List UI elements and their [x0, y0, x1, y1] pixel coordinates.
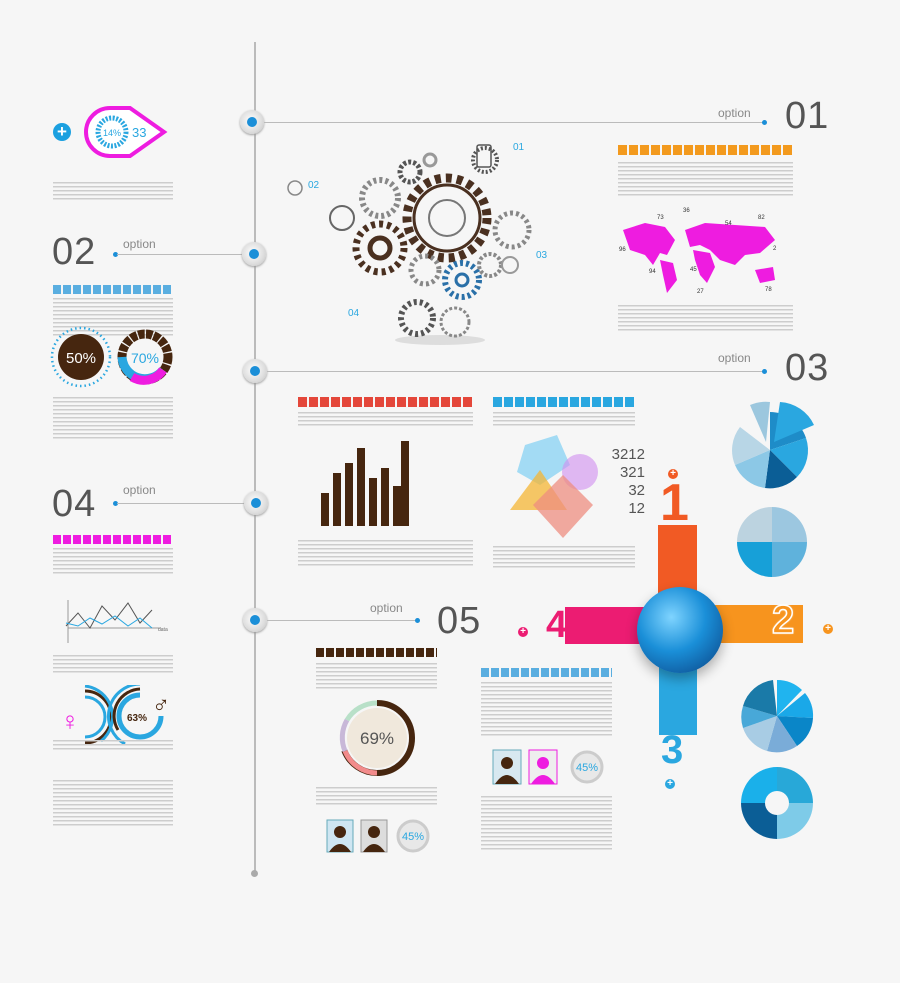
text block: [618, 162, 793, 196]
text block: [53, 298, 173, 338]
arm 2 orange: [705, 605, 803, 643]
text block: [53, 548, 173, 576]
bar chart: [321, 441, 409, 526]
node 5 connector: [242, 608, 420, 634]
gears cluster: 02: [308, 180, 320, 191]
option 04 label: option: [123, 483, 156, 497]
cross infographic with globe: 2: [772, 598, 794, 642]
node 3 connector: [242, 358, 767, 386]
text block: [618, 305, 793, 333]
world map: 27: [697, 289, 704, 295]
pattern bar light blue: [481, 668, 612, 677]
icon: plus: [53, 123, 71, 141]
text block: [316, 787, 437, 807]
chart: 50% and 70%: 70%: [131, 350, 159, 366]
world map: 82: [758, 215, 765, 221]
pattern bar magenta: [53, 535, 173, 544]
pin badge 14% 33: [84, 106, 168, 158]
avatars row 1: 45%: [402, 831, 424, 843]
world map: 2: [773, 246, 777, 252]
text block: [53, 182, 173, 202]
text block: [316, 663, 437, 691]
shapes chart: [510, 435, 598, 538]
numbers list: 32: [628, 482, 645, 499]
pattern bar blue 2: [493, 397, 635, 407]
chart: gender arcs 63%: 63%: [127, 713, 147, 724]
numbers list: 3212: [612, 446, 645, 463]
cross infographic with globe: +: [825, 623, 831, 634]
gears cluster: 04: [348, 308, 360, 319]
world map: 78: [765, 287, 772, 293]
text block: [481, 682, 612, 736]
numbers list: [612, 446, 645, 517]
avatars row 2: [492, 750, 604, 784]
world map: 36: [683, 208, 690, 214]
option 02 label: option: [123, 237, 156, 251]
world map: 73: [657, 215, 664, 221]
gears cluster: 01: [513, 142, 525, 153]
pie charts right: [732, 402, 814, 839]
number 04: 04: [52, 483, 96, 525]
cross infographic with globe: 1: [660, 474, 689, 532]
world map: 96: [619, 247, 626, 253]
text block: [493, 412, 635, 426]
node 1 connector: [238, 110, 767, 136]
option 01 label: option: [718, 106, 751, 120]
world map: 94: [649, 269, 656, 275]
avatars row 1: [326, 820, 430, 852]
text blocks: [53, 740, 173, 752]
line chart: data: [158, 627, 168, 633]
pattern bar red: [298, 397, 473, 407]
chart: 50% and 70%: 50%: [66, 350, 96, 367]
world map: 54: [725, 221, 732, 227]
cross infographic with globe: +: [520, 626, 526, 637]
cross infographic with globe: 3: [661, 728, 683, 772]
arm 4 pink: [565, 607, 675, 644]
chart: gender arcs 63%: ♂: [152, 692, 170, 719]
node 4 connector: [113, 490, 270, 518]
world map: [619, 208, 777, 295]
cross infographic with globe: [518, 468, 833, 789]
text block: [53, 397, 173, 441]
gears cluster: 03: [536, 250, 548, 261]
text block: [53, 780, 173, 826]
pattern bar brown: [316, 648, 437, 657]
chart: gender arcs 63%: ♀: [60, 706, 80, 736]
text block: [298, 412, 473, 428]
option 03 label: option: [718, 351, 751, 365]
text block: [481, 796, 612, 850]
numbers list: 321: [620, 464, 645, 481]
arm 3 blue: [659, 665, 697, 735]
pin badge 14% 33: 14%: [103, 128, 121, 138]
option 05 label: option: [370, 601, 403, 615]
chart: gender arcs 63%: [60, 685, 170, 744]
cross infographic with globe: +: [667, 778, 673, 789]
69% ring: 69%: [360, 729, 394, 748]
chart: 50% and 70%: [50, 326, 172, 388]
plus markers: [668, 469, 678, 479]
number 01: 01: [785, 95, 829, 137]
pattern bar orange: [618, 145, 793, 155]
gears cluster: [287, 142, 548, 345]
line chart: [66, 600, 168, 643]
timeline axis: [254, 42, 256, 873]
numbers list: 12: [628, 500, 645, 517]
avatars row 2: 45%: [576, 762, 598, 774]
globe: [637, 587, 723, 673]
text block: [493, 546, 635, 568]
number 03: 03: [785, 347, 829, 389]
plus markers: +: [670, 468, 676, 479]
pattern bar blue: [53, 285, 173, 294]
69% ring: [340, 700, 415, 776]
text block: [298, 540, 473, 566]
cross infographic with globe: 4: [546, 604, 567, 646]
number 02: 02: [52, 231, 96, 273]
arm 1 orange: [658, 525, 697, 600]
world map: 45: [690, 267, 697, 273]
pin badge 14% 33: 33: [132, 125, 146, 140]
icon: plus: +: [57, 122, 67, 141]
number 05: 05: [437, 600, 481, 642]
node 2 connector: [113, 242, 268, 268]
text block: [53, 655, 173, 675]
